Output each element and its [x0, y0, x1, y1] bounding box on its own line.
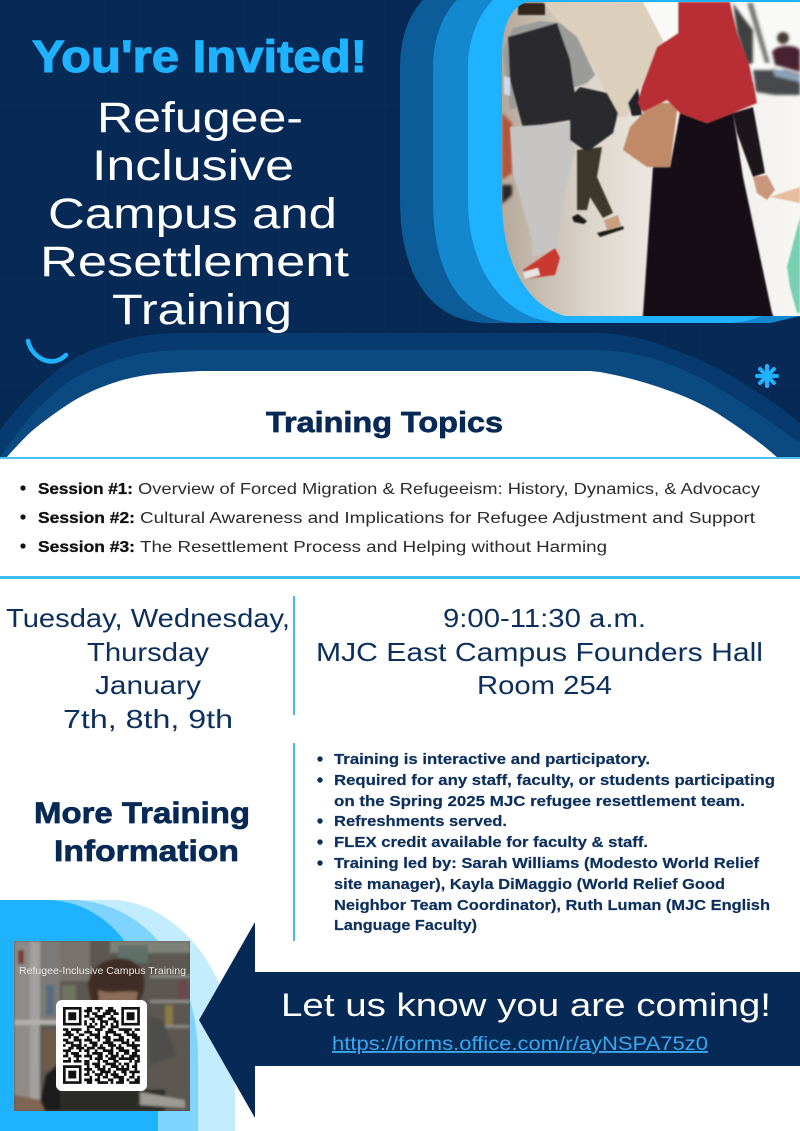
session list: Overview of Forced Migration & Refugeeism: History, Dynamics, & Advocacy: [138, 481, 760, 498]
heading: more training information: [34, 797, 250, 868]
training information list: FLEX credit available for faculty & staff.: [334, 834, 648, 851]
date text: 7th, 8th, 9th: [63, 704, 233, 734]
header background: [0, 0, 800, 460]
title: training name: Inclusive: [92, 142, 294, 190]
photo: people walking through an airport: [500, 2, 800, 320]
heading: more training information: More Training: [34, 797, 250, 830]
round bag: [570, 87, 618, 152]
man: [518, 3, 545, 15]
training information list: Refreshments served.: [334, 813, 507, 830]
date text: Thursday: [87, 637, 209, 667]
heading: more training information: Information: [54, 835, 239, 868]
decorative curved bands behind photo: [400, 0, 800, 323]
heading: training topics: Training Topics: [266, 407, 503, 439]
session list: [20, 481, 760, 556]
curved lower header bands: [0, 333, 800, 460]
registration link: https://forms.office.com/r/ayNSPA75z0: [332, 1034, 708, 1055]
title: training name: Resettlement: [40, 238, 349, 286]
background figures: [502, 3, 800, 204]
date text: [6, 603, 290, 734]
icon: cyan arc: [28, 341, 66, 361]
QR card caption: Refugee-Inclusive Campus Training: [19, 965, 186, 977]
title: training name: Campus and: [48, 190, 337, 238]
session list: Session #3:: [38, 539, 135, 556]
title: training name: [40, 94, 349, 334]
time and location text: 9:00-11:30 a.m.: [443, 603, 646, 633]
wall: [543, 2, 663, 117]
title: training name: Refugee-: [97, 94, 303, 142]
divider middle: [0, 576, 800, 579]
training information list: Required for any staff, faculty, or students participating: [334, 772, 775, 789]
training information list: site manager), Kayla DiMaggio (World Relief Good: [334, 876, 725, 893]
training information list: Neighbor Team Coordinator), Ruth Luman (MJC English: [334, 897, 770, 914]
date text: January: [95, 670, 201, 700]
vertical divider lower: [293, 743, 295, 941]
arrow banner: [199, 922, 800, 1118]
QR code: [56, 1000, 147, 1091]
white panel with arched top: [0, 371, 800, 1131]
time and location text: MJC East Campus Founders Hall: [316, 637, 763, 667]
training information list: Training is interactive and participatory.: [334, 751, 650, 768]
session list: Session #2:: [38, 510, 135, 527]
training information list: [317, 751, 775, 934]
woman: [628, 88, 642, 116]
session list: Session #1:: [38, 481, 133, 498]
icon: cyan asterisk: [757, 366, 777, 386]
vertical divider upper: [293, 596, 295, 715]
title: training name: Training: [112, 286, 292, 334]
child: [577, 147, 613, 218]
session list: The Resettlement Process and Helping without Harming: [140, 539, 607, 556]
time and location text: Room 254: [477, 670, 612, 700]
bottom-left layered blue shapes: [0, 900, 235, 1131]
training information list: on the Spring 2025 MJC refugee resettlement team.: [334, 793, 745, 810]
top cyan edge above photo: [527, 0, 800, 2]
QR card with background photo: [14, 941, 190, 1111]
training information list: Training led by: Sarah Williams (Modesto World Relief: [334, 855, 760, 872]
time and location text: [316, 603, 763, 700]
divider top: [0, 457, 800, 459]
training information list: Language Faculty): [334, 917, 477, 934]
session list: Cultural Awareness and Implications for Refugee Adjustment and Support: [140, 510, 756, 527]
title: you're invited: You're Invited!: [32, 31, 367, 82]
date text: Tuesday, Wednesday,: [6, 603, 290, 633]
call to action text: Let us know you are coming!: [281, 987, 771, 1023]
